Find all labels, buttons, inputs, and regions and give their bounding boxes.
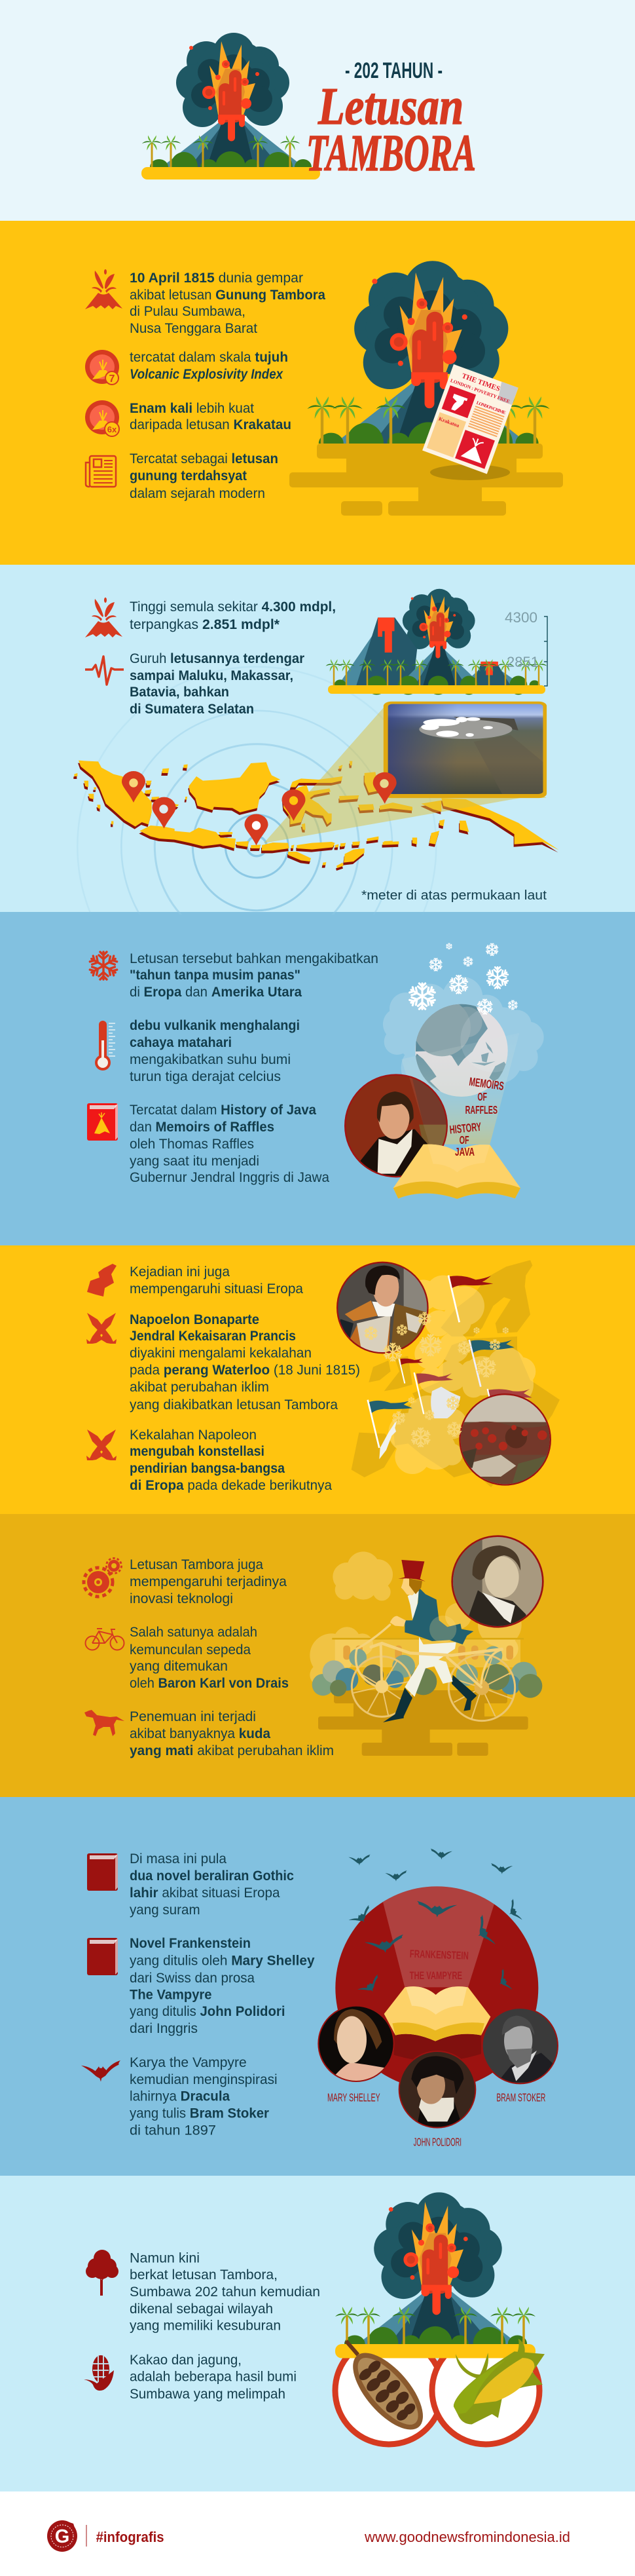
- portrait: Mary Shelley: [318, 2005, 395, 2082]
- icon: book: [87, 1103, 118, 1141]
- section 5 text: Kekalahan Napoleon: [130, 1428, 257, 1443]
- dark lower area: [394, 2033, 481, 2061]
- icon: book: [87, 1853, 118, 1891]
- section 6 text: kemunculan sepeda: [130, 1642, 251, 1657]
- website: www.goodnewsfromindonesia.id: [364, 2529, 570, 2545]
- icon: volcano: [85, 597, 122, 637]
- section 2 text: Volcanic Explosivity Index: [130, 367, 283, 382]
- section 2 icons: [85, 269, 122, 487]
- icon: running horse: [84, 1710, 124, 1736]
- portrait: John Polidori: [399, 2051, 476, 2129]
- section 6 text: yang ditemukan: [130, 1659, 228, 1674]
- book titles: HISTORY: [449, 1120, 482, 1137]
- haze clouds: [388, 1276, 535, 1474]
- section 5 text: pada perang Waterloo (18 Juni 1815): [130, 1363, 360, 1378]
- section 2 text: Enam kali lebih kuat: [130, 401, 254, 416]
- icon: VEI seven badge: 7: [109, 373, 115, 385]
- author names: [327, 2091, 545, 2149]
- panel: header background: [0, 0, 635, 221]
- title: TAMBORA: [306, 125, 476, 182]
- pale snowflakes: [365, 1312, 509, 1447]
- section 2 text: [130, 271, 325, 501]
- newspaper: LONDON : POVERTY FREE: [450, 377, 511, 404]
- icon: cacao pod: [329, 2328, 435, 2441]
- section 6 text: Letusan Tambora juga: [130, 1557, 263, 1572]
- section 4 text: dan Memoirs of Raffles: [130, 1120, 274, 1135]
- title volcano illustration: [141, 33, 320, 180]
- section 8 icons: [84, 2250, 118, 2391]
- novel titles: FRANKENSTEIN: [410, 1948, 469, 1962]
- portrait: Waterloo battle: [459, 1393, 551, 1488]
- section 2 text: gunung terdahsyat: [130, 468, 247, 483]
- section 2 text: Tercatat sebagai letusan: [130, 451, 278, 466]
- section 8 text: Namun kini: [130, 2251, 200, 2265]
- icon: seismic pulse: [85, 656, 124, 685]
- icon: book: [87, 1938, 118, 1975]
- section 7 text: [130, 1851, 315, 2138]
- ground shapes: [289, 444, 563, 516]
- section 7 text: The Vampyre: [130, 1988, 212, 2003]
- section 7 illustration: gothic novels: [318, 1849, 558, 2149]
- panel: europe background: [0, 1245, 635, 1514]
- section 4 text: di Eropa dan Amerika Utara: [130, 985, 302, 1000]
- section 5 text: yang diakibatkan letusan Tambora: [130, 1397, 338, 1412]
- section 7 text: Di masa ini pula: [130, 1851, 227, 1866]
- section 5 text: Jendral Kekaisaran Prancis: [130, 1329, 296, 1344]
- height scale: 4300: [505, 609, 537, 626]
- newspaper: [422, 364, 518, 474]
- europe silhouette: [352, 1260, 560, 1487]
- open book: [393, 1144, 520, 1199]
- section 5 text: akibat perubahan iklim: [130, 1380, 269, 1395]
- flags: [368, 1276, 532, 1448]
- section 4 text: turun tiga derajat celcius: [130, 1069, 281, 1084]
- portrait: Baron Karl von Drais: [451, 1535, 544, 1628]
- icon: erupting volcano: [85, 269, 122, 309]
- section 3 text: Tinggi semula sekitar 4.300 mdpl,: [130, 599, 336, 615]
- section 2 text: Nusa Tenggara Barat: [130, 321, 257, 336]
- icon: snowflake: [89, 952, 118, 979]
- footnote: *meter di atas permukaan laut: [361, 888, 547, 903]
- section 3 text: Guruh letusannya terdengar: [130, 651, 304, 666]
- section 3 text: terpangkas 2.851 mdpl*: [130, 617, 280, 632]
- logo: G: [55, 2526, 69, 2547]
- light beam: [383, 1880, 494, 1987]
- novel titles: [410, 1948, 469, 1982]
- icon: bat: [81, 2060, 120, 2082]
- section 7 text: yang ditulis oleh Mary Shelley: [130, 1954, 315, 1969]
- section 6 text: Penemuan ini terjadi: [130, 1709, 256, 1724]
- section 7 text: yang ditulis John Polidori: [130, 2004, 285, 2019]
- section 4 text: "tahun tanpa musim panas": [130, 968, 300, 983]
- section 7 text: kemudian menginspirasi: [130, 2072, 278, 2087]
- book titles: OF: [460, 1133, 469, 1146]
- portrait: Bram Stoker: [482, 2007, 558, 2085]
- section 6 text: oleh Baron Karl von Drais: [130, 1676, 289, 1691]
- footer: [47, 2520, 570, 2552]
- section 7 text: lahirnya Dracula: [130, 2089, 230, 2104]
- section 3 icons: [85, 597, 124, 685]
- section 7 text: Karya the Vampyre: [130, 2055, 247, 2070]
- sword: [379, 1420, 397, 1459]
- icon: bicycle: [85, 1629, 124, 1650]
- snowflakes: [409, 943, 518, 1014]
- section 8 illustration: [329, 2192, 545, 2444]
- section 3 text: di Sumatera Selatan: [130, 702, 254, 717]
- novel titles: THE VAMPYRE: [410, 1969, 462, 1982]
- frame: [355, 1625, 502, 1687]
- section 7 text: lahir akibat situasi Eropa: [130, 1885, 280, 1901]
- height scale: 2851: [507, 654, 539, 670]
- section 4 text: oleh Thomas Raffles: [130, 1137, 254, 1152]
- indonesia map with photo beam: [73, 702, 559, 871]
- panel: technology background: [0, 1514, 635, 1797]
- section 4 icons: [87, 952, 118, 1141]
- section 4 text: cahaya matahari: [130, 1035, 232, 1050]
- seismic rings: [77, 666, 437, 912]
- title: [306, 58, 476, 182]
- map pins: [122, 771, 397, 845]
- icon: crossed swords: [86, 1313, 117, 1344]
- icon: gears: [84, 1558, 122, 1597]
- section 4 text: [130, 951, 378, 1185]
- icon: VEI seven badge: [85, 350, 119, 385]
- section 5 text: Napoelon Bonaparte: [130, 1312, 259, 1327]
- section 8 text: berkat letusan Tambora,: [130, 2267, 278, 2282]
- section 5 text: di Eropa pada dekade berikutnya: [130, 1478, 332, 1493]
- section 7 text: dari Swiss dan prosa: [130, 1971, 255, 1986]
- author names: MARY SHELLEY: [327, 2091, 380, 2104]
- section 8 text: yang memiliki kesuburan: [130, 2318, 281, 2334]
- section 5 text: Kejadian ini juga: [130, 1264, 230, 1279]
- section 5 illustration: europe map: [336, 1260, 560, 1488]
- section 7 icons: [81, 1853, 120, 2082]
- section 7 text: dari Inggris: [130, 2021, 198, 2036]
- section 5 text: pendirian bangsa-bangsa: [130, 1461, 285, 1476]
- section 5 icons: [86, 1264, 117, 1460]
- height comparison volcanoes: [325, 589, 547, 694]
- section 4 text: yang saat itu menjadi: [130, 1154, 259, 1169]
- book titles: [449, 1075, 505, 1158]
- newspaper: LONDON CRIME: [476, 400, 507, 415]
- section 2 text: tercatat dalam skala tujuh: [130, 350, 288, 365]
- logo: [47, 2520, 77, 2552]
- icon: tree: [86, 2250, 118, 2296]
- section 4 text: mengakibatkan suhu bumi: [130, 1052, 291, 1067]
- bushes: [312, 1646, 542, 1698]
- section 6 text: akibat banyaknya kuda: [130, 1726, 270, 1741]
- section 6 text: [130, 1557, 334, 1758]
- section 3 text: sampai Maluku, Makassar,: [130, 668, 293, 683]
- icon: six times badge: 6x: [107, 425, 117, 434]
- title: Letusan: [318, 78, 463, 136]
- panel: footer background: [0, 2491, 635, 2576]
- book beam: [401, 1033, 519, 1145]
- author names: BRAM STOKER: [496, 2091, 545, 2104]
- ground: [318, 1690, 528, 1756]
- icon: newspaper: [86, 456, 116, 487]
- book titles: MEMOIRS: [468, 1075, 505, 1093]
- tambora crater photo: [384, 702, 547, 798]
- title: - 202 TAHUN -: [345, 58, 443, 83]
- section 2 text: akibat letusan Gunung Tambora: [130, 288, 325, 303]
- section 6 text: mempengaruhi terjadinya: [130, 1574, 287, 1589]
- shield: [431, 1387, 460, 1418]
- section 2 illustration: volcano on ground: [289, 261, 563, 516]
- produce rings: [335, 2337, 539, 2444]
- section 5 text: diyakini mengalami kekalahan: [130, 1346, 312, 1361]
- open book: [384, 1986, 490, 2041]
- section 8 text: adalah beberapa hasil bumi: [130, 2370, 297, 2385]
- portrait: Thomas Raffles: [344, 1074, 448, 1177]
- newspaper: THE TIMES: [461, 372, 501, 393]
- bats: [347, 1849, 524, 1998]
- section 4 text: Gubernur Jendral Inggris di Jawa: [130, 1170, 329, 1185]
- globe: [415, 1004, 508, 1097]
- book titles: OF: [477, 1090, 487, 1103]
- section 3 text: Batavia, bahkan: [130, 685, 229, 700]
- section 2 text: di Pulau Sumbawa,: [130, 304, 245, 319]
- section 4 text: debu vulkanik menghalangi: [130, 1018, 300, 1033]
- cloud haze back: [383, 977, 544, 1092]
- portrait: Napoleon: [336, 1261, 430, 1355]
- icon: thermometer: [95, 1021, 115, 1070]
- section 7 text: Novel Frankenstein: [130, 1936, 251, 1951]
- section 6 text: yang mati akibat perubahan iklim: [130, 1743, 334, 1758]
- icon: europe: [87, 1264, 117, 1297]
- section 6 text: inovasi teknologi: [130, 1591, 233, 1606]
- section 5 text: [130, 1264, 360, 1493]
- section 6 icons: [84, 1558, 124, 1736]
- section 3 text: [130, 599, 336, 717]
- red circle: [335, 1886, 538, 2089]
- icon: crossed swords: [86, 1430, 117, 1460]
- hashtag: #infografis: [96, 2529, 164, 2545]
- pale clouds: [310, 1551, 522, 1686]
- book titles: JAVA: [455, 1145, 475, 1158]
- section 8 text: Kakao dan jagung,: [130, 2353, 242, 2368]
- section 7 text: di tahun 1897: [130, 2123, 216, 2138]
- section 8 text: Sumbawa yang melimpah: [130, 2387, 285, 2402]
- panel: yellow intro background: [0, 221, 635, 565]
- icon: corn: [454, 2339, 545, 2425]
- panel: literature background: [0, 1797, 635, 2176]
- section 7 text: yang tulis Bram Stoker: [130, 2106, 269, 2121]
- section 5 text: mengubah konstellasi: [130, 1444, 264, 1459]
- section 7 text: yang suram: [130, 1903, 200, 1918]
- icon: six times badge: [85, 400, 119, 436]
- panel: climate background: [0, 912, 635, 1245]
- author names: JOHN POLIDORI: [414, 2136, 462, 2149]
- section 6 text: Salah satunya adalah: [130, 1625, 257, 1640]
- wheels: [352, 1654, 515, 1721]
- beam: [264, 708, 547, 843]
- section 5 text: mempengaruhi situasi Eropa: [130, 1281, 303, 1297]
- building: [332, 1638, 524, 1667]
- section 4 illustration: [344, 943, 544, 1199]
- rider: [383, 1560, 477, 1722]
- section 8 text: Sumbawa 202 tahun kemudian: [130, 2284, 320, 2300]
- icon: corn: [84, 2355, 114, 2391]
- newspaper: Krakatoa: [438, 416, 460, 428]
- panel: location background: [0, 565, 635, 912]
- section 2 text: 10 April 1815 dunia gempar: [130, 271, 303, 286]
- height scale: [505, 609, 547, 686]
- section 4 text: Letusan tersebut bahkan mengakibatkan: [130, 951, 378, 966]
- section 4 text: Tercatat dalam History of Java: [130, 1103, 316, 1118]
- section 6 illustration: draisine rider: [310, 1535, 544, 1756]
- section 7 text: dua novel beraliran Gothic: [130, 1868, 294, 1884]
- section 2 text: dalam sejarah modern: [130, 486, 265, 501]
- book titles: RAFFLES: [465, 1103, 498, 1116]
- section 8 text: [130, 2251, 320, 2402]
- section 8 text: dikenal sebagai wilayah: [130, 2301, 273, 2317]
- panel: sumbawa background: [0, 2176, 635, 2491]
- section 2 text: daripada letusan Krakatau: [130, 417, 291, 432]
